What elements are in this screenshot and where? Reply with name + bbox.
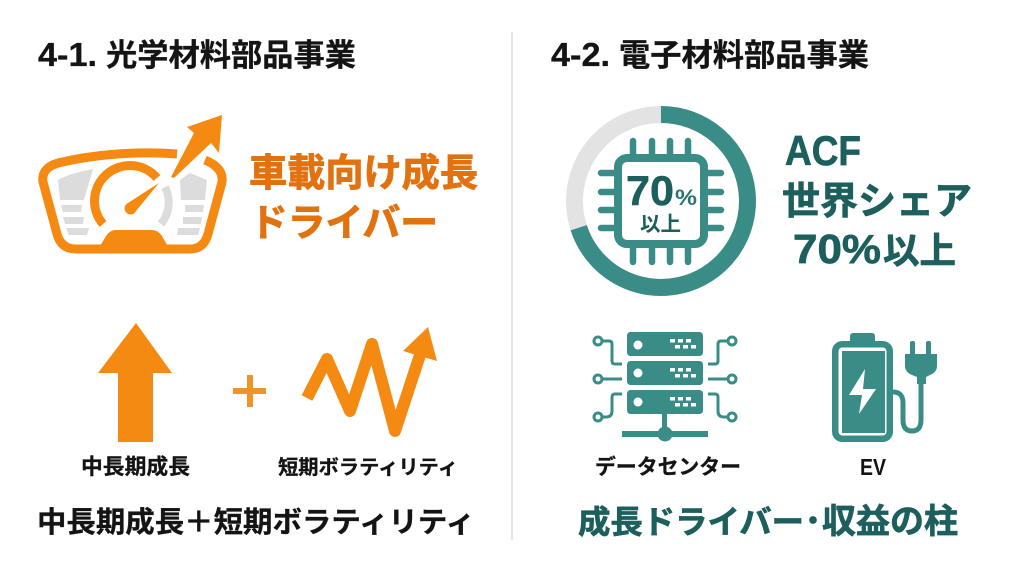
- label: 短期ボラティリティ: 短期ボラティリティ: [278, 456, 458, 479]
- text: 車載向け成長ドライバー: ドライバー: [250, 203, 438, 245]
- text: ACF 世界シェア 70%以上: 70%: [793, 226, 881, 272]
- text: ACF 世界シェア 70%以上: 以上: [883, 230, 956, 271]
- bottom text: right: 収益の柱: [822, 503, 958, 541]
- text: ACF 世界シェア 70%以上: [782, 127, 972, 272]
- icon: donut gauge with chip: [574, 114, 748, 288]
- icon: data center server: [594, 332, 736, 442]
- heading: 4-2: 電子材料部品事業: [619, 38, 869, 73]
- icon: volatile arrow: [307, 327, 437, 431]
- text: ACF 世界シェア 70%以上: 世界シェア: [782, 181, 972, 223]
- bottom text: right: 成長ドライバー: [578, 504, 804, 540]
- icon: dashboard with growth arrow: [43, 115, 222, 250]
- icon: donut gauge with chip: 70: [626, 167, 674, 214]
- heading: 4-2: 4-2.: [551, 36, 610, 73]
- icon: EV battery with plug: [835, 333, 937, 439]
- text: 車載向け成長ドライバー: [249, 153, 478, 245]
- text: ACF 世界シェア 70%以上: ACF: [785, 127, 861, 174]
- label: EV: EV: [860, 454, 887, 480]
- heading: 4-1: 4-1.: [38, 36, 97, 73]
- label: 中長期成長: 中長期成長: [81, 455, 190, 479]
- heading: 4-1: 光学材料部品事業: [106, 38, 356, 73]
- bottom text: left: 中長期成長＋短期ボラティリティ: [37, 506, 475, 539]
- bottom text: right: [578, 503, 958, 541]
- label: データセンター: データセンター: [595, 455, 741, 479]
- icon: up arrow: [98, 323, 172, 442]
- icon: plus: [233, 375, 266, 407]
- icon: donut gauge with chip: 以上: [640, 213, 681, 236]
- icon: donut gauge with chip: %: [675, 185, 697, 210]
- text: 車載向け成長ドライバー: 車載向け成長: [249, 153, 478, 195]
